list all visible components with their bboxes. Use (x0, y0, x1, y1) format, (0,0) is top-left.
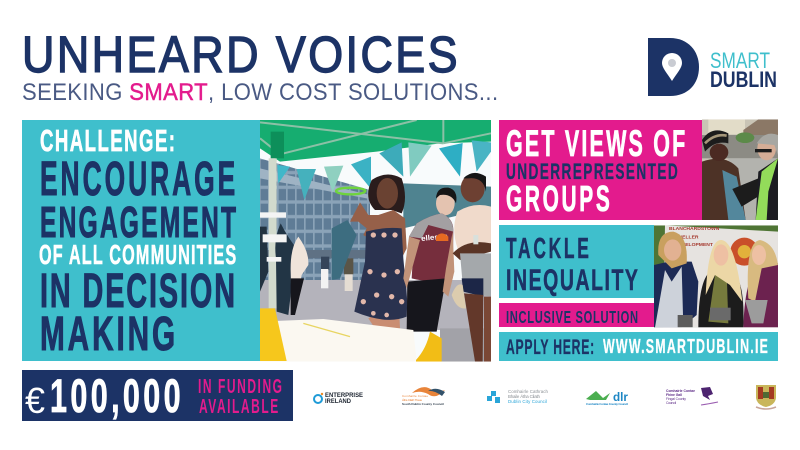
logo: Dublin City Council: Bhaile Átha Cliath (508, 394, 541, 399)
panel: challenge: CHALLENGE: (40, 124, 175, 158)
logo: Fingal County Council (666, 387, 718, 405)
logo: Enterprise Ireland: ENTERPRISE (325, 393, 363, 399)
photo: three women with buckets (654, 225, 778, 327)
panel: tackle inequality (499, 225, 654, 298)
logo: Fingal County Council: Comhairle Contae (666, 389, 695, 393)
logo: Fingal County Council: Council (666, 401, 676, 405)
logo: Enterprise Ireland (314, 393, 363, 405)
panel: challenge: IN DECISION (40, 265, 235, 318)
boy in ellesse tee (436, 194, 455, 216)
logo: crest (756, 385, 776, 409)
people in background (275, 224, 294, 315)
panel: inclusive solution: INCLUSIVE SOLUTION (506, 307, 638, 328)
logo: Dublin City Council: Comhairle Cathrach (508, 389, 549, 394)
panel: get views: UNDERREPRESENTED (506, 159, 678, 184)
logo: South Dublin County Council (402, 387, 445, 406)
panel: challenge: ENGAGEMENT (40, 198, 236, 247)
logo: South Dublin County Council: Átha Cliath Theas (402, 398, 422, 402)
panel: challenge: MAKING (40, 308, 175, 361)
logo: Dublin City Council: Dublin City Council (508, 399, 547, 404)
bunting (277, 165, 290, 183)
panel: tackle inequality: TACKLE (506, 233, 589, 265)
panel: funding (22, 370, 293, 423)
panel: tackle inequality: INEQUALITY (506, 264, 638, 297)
title: UNHEARD VOICES (22, 27, 458, 84)
panel: challenge (22, 120, 260, 361)
panel: get views: GET VIEWS OF (506, 124, 685, 165)
table (260, 319, 417, 362)
panel: get views: GROUPS (506, 179, 610, 220)
panel: get views (499, 120, 702, 220)
logo: dlr: dlr (613, 390, 628, 404)
photo: three women with buckets: BLANCHARDSTOWN (669, 226, 720, 232)
logo: South Dublin County Council: Comhairle Contae (402, 394, 428, 398)
logo: Enterprise Ireland: IRELAND (325, 399, 352, 405)
panel: apply here (499, 332, 778, 361)
girl in white top (460, 178, 485, 202)
canopy (260, 120, 491, 162)
cones (260, 308, 287, 361)
photo: two women with clipboard (702, 119, 778, 220)
panel: challenge: OF ALL COMMUNITIES (39, 238, 236, 270)
ring (336, 188, 365, 194)
panel: challenge: ENCOURAGE (40, 153, 235, 206)
photo: ring toss at outdoor stall: ellesse (421, 231, 448, 243)
logo: Smart Dublin: DUBLIN (710, 67, 777, 92)
logo: Smart Dublin: SMART (710, 48, 770, 73)
panel: funding: € (25, 380, 45, 421)
panel: funding: AVAILABLE (199, 396, 278, 418)
panel: funding: IN FUNDING (198, 376, 282, 398)
subtitle: SEEKING SMART, LOW COST SOLUTIONS... (22, 78, 498, 105)
logo: Dublin City Council (487, 389, 549, 404)
logo: Fingal County Council: Fhine Gall (666, 393, 682, 397)
photo: three women with buckets: TRAVELLER (669, 234, 699, 240)
logo: Fingal County Council: Fingal County (666, 397, 686, 401)
logo: South Dublin County Council: South Dublin County Council (402, 402, 444, 406)
logo: Smart Dublin (648, 38, 777, 96)
panel: apply here: APPLY HERE: (506, 334, 594, 359)
panel: apply here: WWW.SMARTDUBLIN.IE (603, 335, 768, 358)
logo: dlr (586, 390, 628, 406)
photo: ring toss at outdoor stall (260, 120, 491, 362)
logo: dlr: Comhairle Contae County Council (586, 402, 628, 406)
photo: three women with buckets: DEVELOPMENT (675, 242, 713, 248)
girl in dress (368, 317, 400, 328)
panel: funding: 100,000 (50, 370, 181, 423)
